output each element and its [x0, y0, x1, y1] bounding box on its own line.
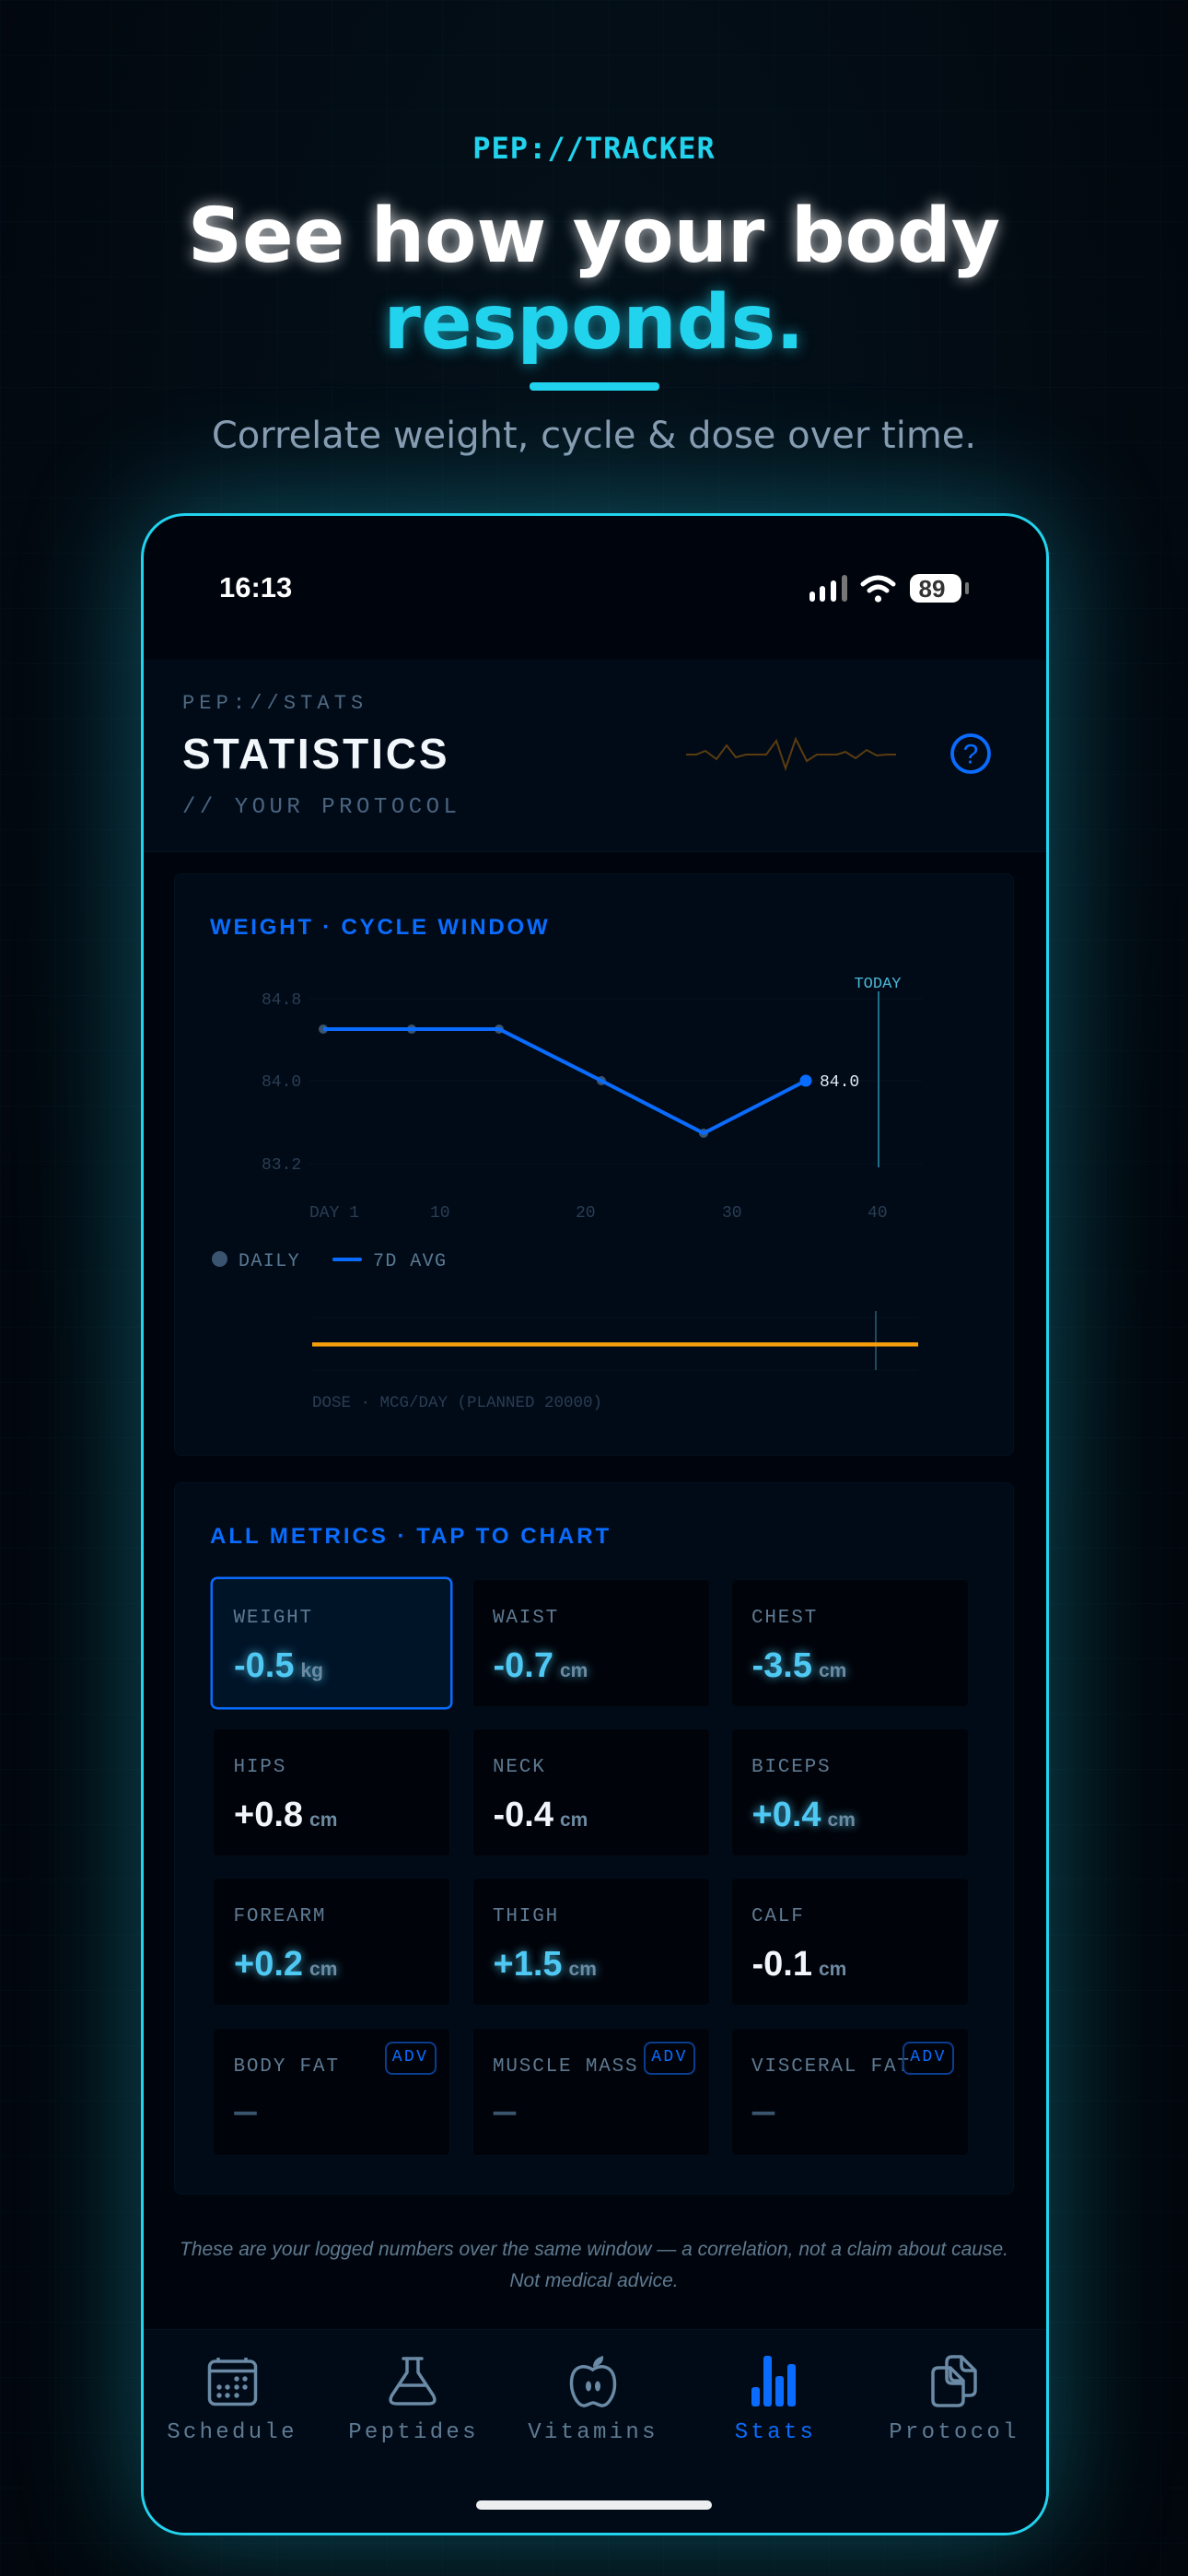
- metric: muscle mass: ADV: [651, 2048, 688, 2067]
- icon: schedule calendar: [208, 2358, 258, 2406]
- metric: weight: WEIGHT: [234, 1607, 313, 1629]
- metric: muscle mass: [472, 2028, 709, 2156]
- metric: hips: +0.8 cm: [234, 1795, 337, 1833]
- metric: visceral fat: VISCERAL FAT: [751, 2056, 911, 2077]
- panel: bottom navigation: [144, 2329, 1046, 2533]
- metric: visceral fat: ADV: [910, 2048, 947, 2067]
- metric: forearm: [213, 1878, 450, 2006]
- nav label: stats: Stats: [735, 2420, 816, 2445]
- metric: biceps: [731, 1728, 969, 1856]
- panel: weight chart: 10: [430, 1204, 450, 1223]
- metric: body fat: —: [235, 2100, 256, 2124]
- metric: forearm: +0.2 cm: [234, 1944, 337, 1983]
- metric: body fat: BODY FAT: [234, 2056, 340, 2077]
- icon: stats bars: [751, 2356, 796, 2406]
- metric: neck: [472, 1728, 709, 1856]
- metric: thigh: THIGH: [493, 1905, 559, 1927]
- legend: daily: [212, 1251, 227, 1266]
- metric: waist: -0.7 cm: [494, 1645, 588, 1684]
- icon: help: [950, 733, 991, 774]
- line chart: 84.0: [820, 1073, 859, 1092]
- metric: chest: -3.5 cm: [751, 1645, 846, 1684]
- line chart: [312, 976, 918, 1370]
- panel: weight chart: 30: [722, 1204, 742, 1223]
- home indicator: [476, 2500, 712, 2510]
- line chart: TODAY: [854, 976, 902, 993]
- icon: peptides flask: [389, 2357, 437, 2406]
- metric: hips: [213, 1728, 450, 1856]
- icon: help: ?: [963, 739, 978, 770]
- metric: visceral fat: [731, 2028, 969, 2156]
- header subtitle: // YOUR PROTOCOL: [182, 795, 460, 820]
- metric: chest: CHEST: [751, 1607, 818, 1629]
- metric: calf: [731, 1878, 969, 2006]
- metric: calf: CALF: [751, 1905, 805, 1927]
- chart heading: WEIGHT · CYCLE WINDOW: [210, 915, 550, 940]
- metric: chest: [731, 1579, 969, 1707]
- sparkline: [686, 737, 896, 771]
- eyebrow: PEP://TRACKER: PEP://TRACKER: [472, 131, 716, 166]
- metric: waist: WAIST: [493, 1607, 559, 1629]
- metric: waist: [472, 1579, 709, 1707]
- panel: all metrics: [174, 1482, 1014, 2195]
- panel: weight chart: 20: [576, 1204, 596, 1223]
- legend: 7d avg: [332, 1258, 362, 1261]
- icon: vitamins apple: [569, 2356, 617, 2407]
- metric: weight: [213, 1579, 450, 1707]
- panel: weight chart: 7D AVG: [373, 1251, 447, 1272]
- metric: biceps: +0.4 cm: [751, 1795, 856, 1833]
- x axis labels: DAY 1: [309, 1204, 359, 1223]
- metric: biceps: BICEPS: [751, 1756, 831, 1778]
- icon: protocol documents: [931, 2355, 977, 2407]
- metric: forearm: FOREARM: [234, 1905, 326, 1927]
- nav label: schedule: Schedule: [167, 2420, 297, 2445]
- metric: muscle mass: MUSCLE MASS: [493, 2056, 638, 2077]
- panel: weight chart: DAILY: [239, 1251, 300, 1272]
- metric: weight: -0.5 kg: [234, 1645, 323, 1684]
- dose caption: DOSE · MCG/DAY (PLANNED 20000): [312, 1394, 602, 1412]
- subtitle: Correlate weight, cycle & dose over time.: [212, 415, 976, 457]
- metric: visceral fat: —: [753, 2100, 774, 2124]
- metrics heading: ALL METRICS · TAP TO CHART: [210, 1524, 611, 1549]
- status bar icons: signal, wifi, battery: 89: [919, 575, 945, 603]
- status bar time: 16:13: [219, 571, 292, 603]
- y axis labels: 84.8: [262, 991, 301, 1010]
- disclaimer footnote: These are your logged numbers over the same window — a correlation, not a claim about cause.: [180, 2239, 1008, 2260]
- metric: calf: -0.1 cm: [751, 1944, 846, 1983]
- metric: thigh: [472, 1878, 709, 2006]
- metric: muscle mass: —: [494, 2100, 516, 2124]
- status bar icons: signal, wifi, battery: [809, 574, 969, 603]
- metric: body fat: [213, 2028, 450, 2156]
- header title: STATISTICS: [182, 730, 450, 778]
- phone frame: [141, 513, 1049, 2535]
- title underline accent: [530, 382, 659, 391]
- metric: thigh: +1.5 cm: [494, 1944, 597, 1983]
- metric: hips: HIPS: [234, 1756, 286, 1778]
- nav label: vitamins: Vitamins: [528, 2420, 658, 2445]
- header eyebrow: PEP://STATS: [182, 692, 367, 715]
- disclaimer footnote: Not medical advice.: [509, 2270, 679, 2291]
- panel: weight chart: 84.0: [262, 1072, 301, 1091]
- title: [182, 193, 1007, 372]
- title: See how your body: [188, 193, 1000, 280]
- metric: body fat: ADV: [392, 2048, 428, 2067]
- disclaimer footnote: [180, 2239, 1008, 2291]
- panel: weight chart: 83.2: [262, 1155, 301, 1174]
- metric: neck: NECK: [493, 1756, 546, 1778]
- nav label: protocol: Protocol: [889, 2420, 1019, 2445]
- panel: weight chart: 40: [868, 1204, 888, 1223]
- title: responds.: [384, 279, 804, 367]
- metric: neck: -0.4 cm: [494, 1795, 588, 1833]
- panel: weight chart: [174, 873, 1014, 1456]
- nav label: peptides: Peptides: [348, 2420, 479, 2445]
- panel: header: [144, 660, 1046, 852]
